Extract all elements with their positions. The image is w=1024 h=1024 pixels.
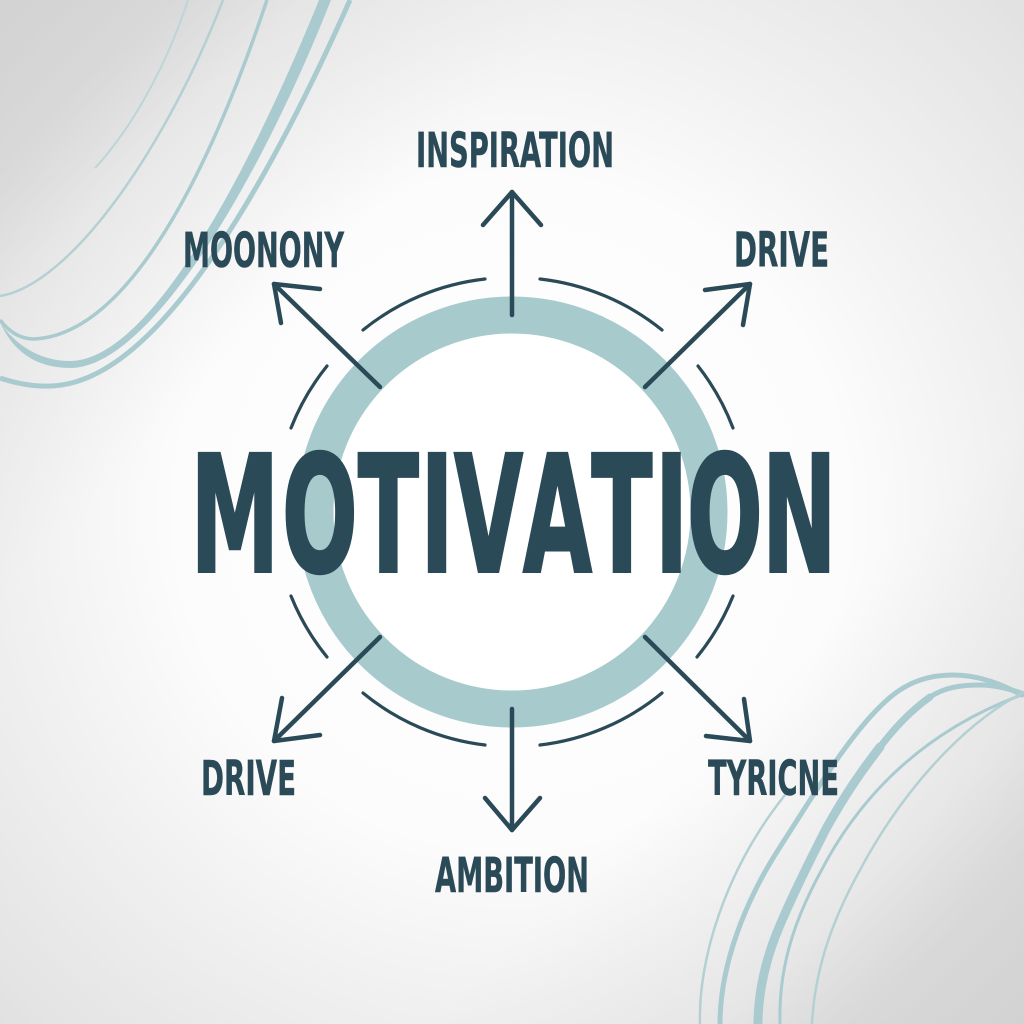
label: drive lower left: DRIVE [201,751,296,807]
label: ambition: AMBITION [435,848,589,904]
central ring [315,315,709,709]
label: tyricne: TYRICNE [708,751,839,807]
arrow: lower left [274,637,380,741]
label: moonony: MOONONY [183,223,345,279]
label: drive upper right: DRIVE [734,222,829,278]
decorative curves: top left [0,0,350,386]
label: inspiration: INSPIRATION [416,123,614,179]
outer dashed arcs [291,279,733,745]
arrow: down [485,709,540,830]
arrow: upper left [274,284,380,387]
arrow: up [483,192,541,315]
decorative curves: bottom right [700,675,1024,1024]
arrow: upper right [645,284,750,387]
title: MOTIVATION [191,422,837,610]
arrow: lower right [645,637,750,741]
